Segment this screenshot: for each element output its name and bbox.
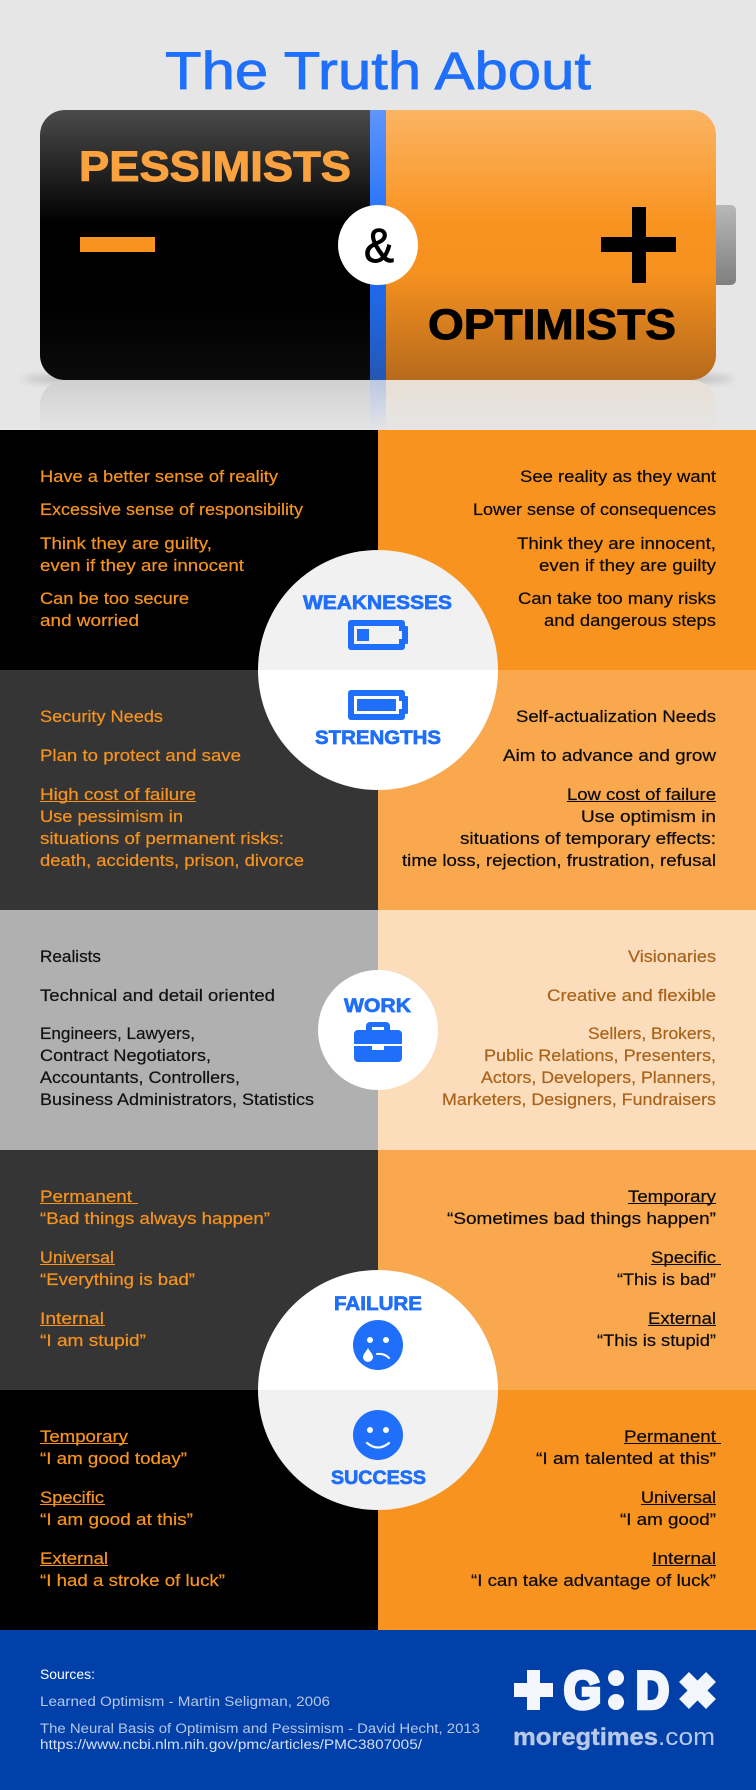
text block: optimist success explanations: “I can take advantage of luck” xyxy=(471,1572,716,1590)
text block: sources: Sources: xyxy=(40,1667,95,1682)
text block: optimist weaknesses list xyxy=(473,468,717,630)
text block: weaknesses list xyxy=(40,468,304,630)
logo: website xyxy=(513,1724,715,1751)
logo: website: .com xyxy=(658,1724,715,1751)
icon: briefcase xyxy=(354,1022,402,1062)
text block: strengths list: Use pessimism in xyxy=(40,808,183,826)
text block: optimist failure explanations: Temporary xyxy=(628,1188,717,1206)
blue divider xyxy=(370,110,386,380)
battery reflection xyxy=(40,380,716,430)
battery negative half xyxy=(40,110,370,380)
text block: weaknesses list: and worried xyxy=(40,612,139,630)
text block: optimist weaknesses list: Can take too many risks xyxy=(518,590,716,608)
panel: strengths pessimists xyxy=(0,670,378,910)
text block: strengths list: death, accidents, prison, divorce xyxy=(40,852,304,870)
text block: optimist failure explanations xyxy=(447,1188,721,1350)
text block: visionaries work list: Public Relations, Presenters, xyxy=(484,1047,716,1065)
text block: optimist strengths list: situations of temporary effects: xyxy=(460,830,716,848)
header background xyxy=(0,0,756,430)
panel: strengths optimists xyxy=(378,670,756,910)
text block: weaknesses list: Think they are guilty, xyxy=(40,535,212,553)
icon: low battery xyxy=(348,620,408,650)
text block: visionaries work list: Marketers, Designers, Fundraisers xyxy=(442,1091,716,1109)
heading: success: SUCCESS xyxy=(331,1467,426,1489)
text block: optimist weaknesses list: Think they are innocent, xyxy=(517,535,716,553)
text block: optimist failure explanations: “This is stupid” xyxy=(597,1332,716,1350)
text block: realists work list: Business Administrators, Statistics xyxy=(40,1091,314,1109)
text block: visionaries work list: Visionaries xyxy=(628,948,716,966)
text block: optimist strengths list: Use optimism in xyxy=(581,808,716,826)
text block: optimist strengths list: Aim to advance and grow xyxy=(503,747,716,765)
text block: sources: The Neural Basis of Optimism and Pessimism - David Hecht, 2013 xyxy=(40,1721,480,1736)
text block: pessimist failure explanations: “Bad things always happen” xyxy=(40,1210,270,1228)
text block: realists work list: Engineers, Lawyers, xyxy=(40,1025,195,1043)
text block: pessimist success explanations: External xyxy=(40,1550,108,1568)
text block: optimist failure explanations: Specific xyxy=(651,1249,716,1267)
text block: visionaries work list: Actors, Developers, Planners, xyxy=(481,1069,716,1087)
text block: visionaries work list xyxy=(442,948,716,1109)
badge: failure and success xyxy=(258,1270,498,1510)
text block: optimist success explanations: “I am good” xyxy=(620,1511,716,1529)
ampersand badge: & xyxy=(364,220,394,273)
text block: pessimist failure explanations: Universal xyxy=(40,1249,114,1267)
text block: weaknesses list: Can be too secure xyxy=(40,590,189,608)
text block: optimist weaknesses list: and dangerous steps xyxy=(544,612,716,630)
text block: realists work list: Contract Negotiators, xyxy=(40,1047,211,1065)
logo: website: moregtimes xyxy=(513,1724,658,1751)
text block: optimist failure explanations: “This is bad” xyxy=(617,1271,716,1289)
text block: sources: https://www.ncbi.nlm.nih.gov/pmc/articles/PMC3807005/ xyxy=(40,1737,422,1752)
icon: minus xyxy=(80,237,155,252)
text block: pessimist success explanations xyxy=(40,1428,225,1590)
badge: work xyxy=(318,970,438,1090)
icon: crying face xyxy=(353,1320,403,1370)
title: The Truth About xyxy=(165,42,591,101)
heading: pessimists: PESSIMISTS xyxy=(79,143,351,191)
heading: work: WORK xyxy=(344,995,411,1017)
text block: visionaries work list: Sellers, Brokers, xyxy=(588,1025,716,1043)
text block: optimist weaknesses list: even if they are guilty xyxy=(539,557,717,575)
text block: strengths list: Security Needs xyxy=(40,708,163,726)
text block: visionaries work list: Creative and flexible xyxy=(547,987,716,1005)
text block: pessimist success explanations: Temporary xyxy=(40,1428,129,1446)
heading: optimists: OPTIMISTS xyxy=(428,301,676,349)
text block: optimist strengths list: time loss, rejection, frustration, refusal xyxy=(402,852,716,870)
text block: strengths list: situations of permanent risks: xyxy=(40,830,284,848)
text block: optimist strengths list xyxy=(402,708,716,870)
panel: work optimists xyxy=(378,910,756,1150)
panel: weaknesses pessimists xyxy=(0,430,378,670)
text block: pessimist success explanations: “I am good at this” xyxy=(40,1511,193,1529)
text block: optimist weaknesses list: See reality as they want xyxy=(520,468,717,486)
text block: pessimist success explanations: “I had a stroke of luck” xyxy=(40,1572,225,1590)
battery terminal cap xyxy=(716,205,736,285)
text block: optimist success explanations: Permanent xyxy=(624,1428,717,1446)
icon: battery xyxy=(40,110,736,380)
text block: sources: Learned Optimism - Martin Seligman, 2006 xyxy=(40,1694,330,1709)
icon: full battery xyxy=(348,690,408,720)
text block: optimist weaknesses list: Lower sense of consequences xyxy=(473,501,716,519)
text block: realists work list: Accountants, Controllers, xyxy=(40,1069,240,1087)
logo: GDX mark: G xyxy=(564,1662,601,1720)
icon: smiling face xyxy=(353,1410,403,1460)
text block: realists work list xyxy=(40,948,314,1109)
logo: GDX mark: D xyxy=(636,1662,669,1720)
heading: weaknesses: WEAKNESSES xyxy=(303,592,452,614)
text block: weaknesses list: Have a better sense of reality xyxy=(40,468,279,486)
heading: failure: FAILURE xyxy=(334,1293,422,1315)
panel: work pessimists xyxy=(0,910,378,1150)
icon: plus xyxy=(601,207,676,283)
logo: GDX mark xyxy=(514,1662,711,1720)
panel: footer xyxy=(0,1630,756,1790)
text block: pessimist failure explanations: Internal xyxy=(40,1310,104,1328)
text block: realists work list: Realists xyxy=(40,948,101,966)
panel: weaknesses optimists xyxy=(378,430,756,670)
panel: failure pessimists xyxy=(0,1150,378,1390)
text block: optimist success explanations xyxy=(471,1428,721,1590)
text block: pessimist success explanations: “I am good today” xyxy=(40,1450,187,1468)
panel: success pessimists xyxy=(0,1390,378,1630)
text block: strengths list: Plan to protect and save xyxy=(40,747,241,765)
text block: optimist strengths list: Low cost of failure xyxy=(567,786,716,804)
panel: failure optimists xyxy=(378,1150,756,1390)
text block: pessimist failure explanations: “I am stupid” xyxy=(40,1332,146,1350)
text block: optimist failure explanations: External xyxy=(648,1310,716,1328)
text block: strengths list: High cost of failure xyxy=(40,786,196,804)
text block: optimist failure explanations: “Sometimes bad things happen” xyxy=(447,1210,716,1228)
ampersand badge xyxy=(338,205,418,285)
text block: optimist success explanations: Universal xyxy=(641,1489,716,1507)
text block: pessimist failure explanations: “Everything is bad” xyxy=(40,1271,195,1289)
text block: sources xyxy=(40,1667,480,1752)
text block: weaknesses list: Excessive sense of responsibility xyxy=(40,501,304,519)
battery shadow xyxy=(22,373,734,385)
text block: weaknesses list: even if they are innocent xyxy=(40,557,245,575)
text block: pessimist failure explanations xyxy=(40,1188,270,1350)
text block: strengths list xyxy=(40,708,304,870)
text block: optimist strengths list: Self-actualization Needs xyxy=(516,708,716,726)
text block: optimist success explanations: Internal xyxy=(652,1550,716,1568)
panel: success optimists xyxy=(378,1390,756,1630)
text block: optimist success explanations: “I am talented at this” xyxy=(536,1450,716,1468)
text block: pessimist failure explanations: Permanent xyxy=(40,1188,133,1206)
heading: strengths: STRENGTHS xyxy=(315,727,441,749)
text block: pessimist success explanations: Specific xyxy=(40,1489,104,1507)
battery positive half xyxy=(386,110,716,380)
badge: weaknesses and strengths xyxy=(258,550,498,790)
text block: realists work list: Technical and detail oriented xyxy=(40,987,275,1005)
